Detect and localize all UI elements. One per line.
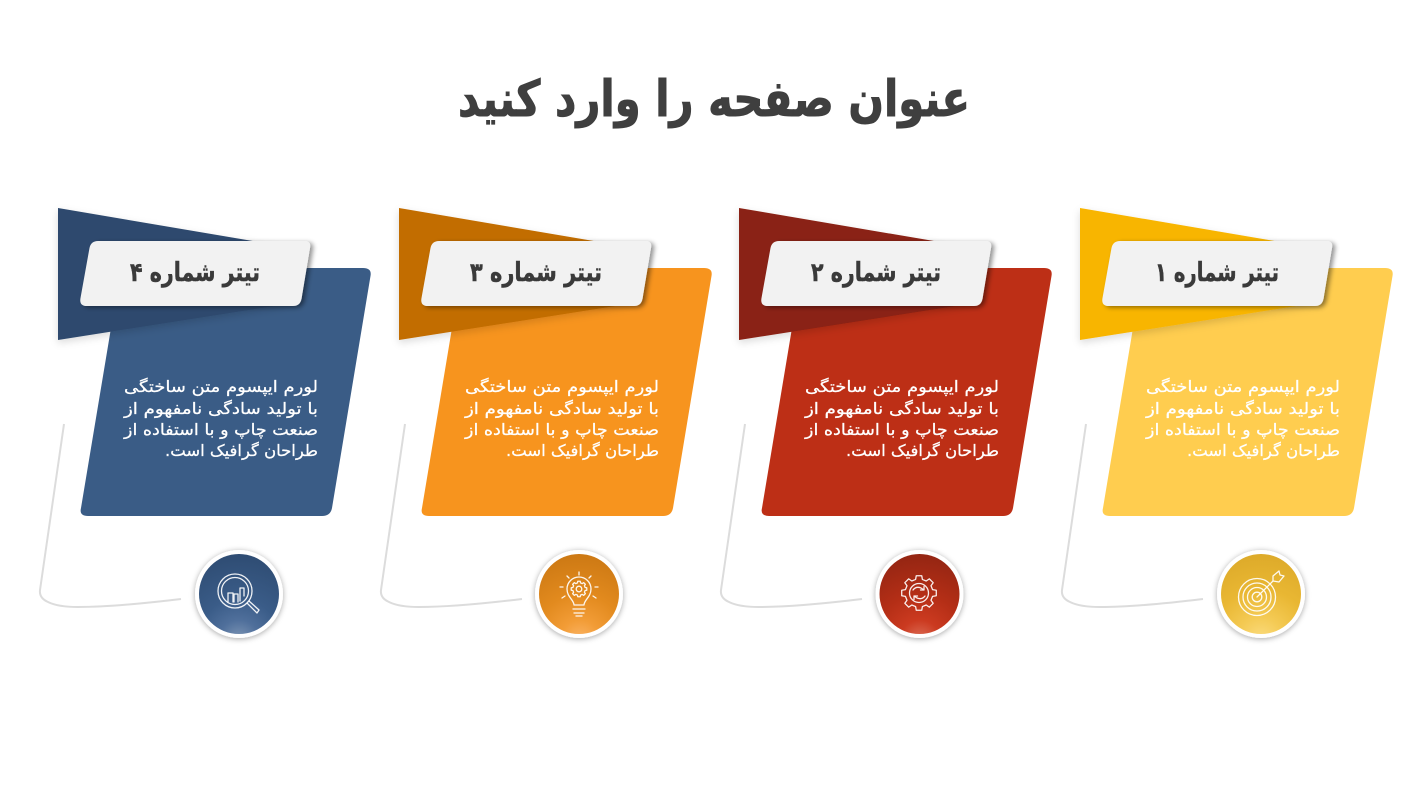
heading plate 2: [761, 241, 991, 306]
description 1: [1145, 377, 1340, 461]
panel: step 4: [40, 208, 371, 638]
icon: gear with arrows: [876, 550, 964, 638]
connector line 1: [1062, 424, 1203, 607]
card body 2: [762, 268, 1052, 516]
heading plate 3: [421, 241, 651, 306]
description 3: طراحان گرافیک است.: [506, 441, 659, 461]
flag triangle 1: [1080, 208, 1322, 340]
description 3: با تولید سادگی نامفهوم از: [464, 399, 659, 419]
panel: step 3: [381, 208, 712, 638]
description 2: طراحان گرافیک است.: [846, 441, 999, 461]
description 4: با تولید سادگی نامفهوم از: [123, 399, 318, 419]
description 1: با تولید سادگی نامفهوم از: [1145, 399, 1340, 419]
panel: step 1: [1062, 208, 1393, 638]
description 1: لورم ایپسوم متن ساختگی: [1146, 377, 1340, 397]
card body 3: [422, 268, 712, 516]
description 4: [123, 377, 318, 461]
flag triangle 3: [399, 208, 641, 340]
description 1: صنعت چاپ و با استفاده از: [1145, 420, 1340, 440]
flag triangle 2: [739, 208, 981, 340]
description 3: [464, 377, 659, 461]
description 2: [804, 377, 999, 461]
panel: step 2: [721, 208, 1052, 638]
description 2: صنعت چاپ و با استفاده از: [804, 420, 999, 440]
icon: magnifier with chart: [195, 550, 283, 638]
description 2: با تولید سادگی نامفهوم از: [804, 399, 999, 419]
card body 1: [1103, 268, 1393, 516]
description 4: طراحان گرافیک است.: [165, 441, 318, 461]
description 2: لورم ایپسوم متن ساختگی: [805, 377, 999, 397]
connector line 2: [721, 424, 862, 607]
icon: target with arrow: [1217, 550, 1305, 638]
connector line 4: [40, 424, 181, 607]
title: عنوان صفحه را وارد کنید: [458, 70, 970, 129]
heading plate 4: [80, 241, 310, 306]
description 4: لورم ایپسوم متن ساختگی: [124, 377, 318, 397]
card body 4: [81, 268, 371, 516]
description 3: صنعت چاپ و با استفاده از: [464, 420, 659, 440]
heading plate 1: [1102, 241, 1332, 306]
heading 2: تیتر شماره ۲: [811, 258, 941, 288]
description 1: طراحان گرافیک است.: [1187, 441, 1340, 461]
icon: light bulb with gear: [535, 550, 623, 638]
heading 4: تیتر شماره ۴: [130, 258, 260, 288]
connector line 3: [381, 424, 522, 607]
heading 1: تیتر شماره ۱: [1155, 258, 1279, 288]
heading 3: تیتر شماره ۳: [470, 258, 602, 288]
description 3: لورم ایپسوم متن ساختگی: [465, 377, 659, 397]
flag triangle 4: [58, 208, 300, 340]
description 4: صنعت چاپ و با استفاده از: [123, 420, 318, 440]
